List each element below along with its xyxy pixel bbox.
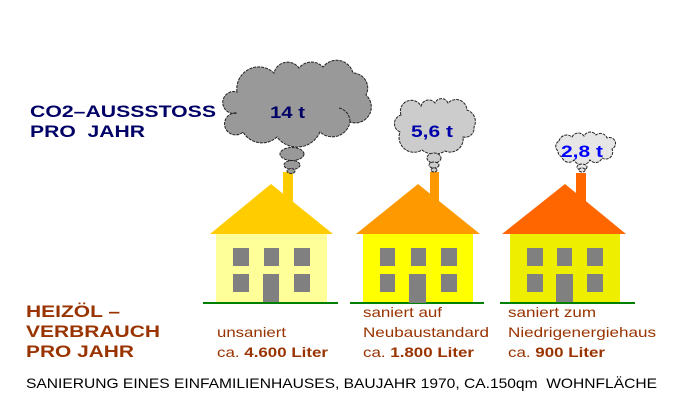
house 2: new-build standard [350, 172, 484, 304]
text: house 3 consumption: Niedrigenergiehaus [508, 324, 656, 340]
heading: heating oil consumption per year: VERBRAUCH [26, 322, 160, 341]
text: house 3 consumption [508, 304, 656, 360]
heading: CO2 output per year [30, 102, 216, 141]
text: house 2 consumption: saniert auf [363, 304, 442, 320]
text: house 1 consumption: ca. 4.600 Liter [217, 344, 329, 360]
cloud 3: 2,8 t [556, 132, 616, 172]
house 1: unrenovated [203, 172, 338, 304]
text: house 3 consumption: ca. 900 Liter [508, 344, 606, 360]
text: house 3 consumption: saniert zum [508, 304, 596, 320]
text: house 1 consumption [217, 324, 329, 360]
heading: heating oil consumption per year: HEIZÖL – [26, 302, 120, 321]
text: house 2 consumption: ca. 1.800 Liter [363, 344, 475, 360]
label: 5,6 t: 5,6 t [411, 122, 453, 141]
label: 14 t: 14 t [270, 103, 305, 122]
heading: CO2 output per year: PRO JAHR [30, 122, 145, 141]
footer caption: SANIERUNG EINES EINFAMILIENHAUSES, BAUJAHR 1970, CA.150qm WOHNFLÄCHE [26, 375, 657, 391]
heading: CO2 output per year: CO2–AUSSSTOSS [30, 102, 216, 121]
house 3: low-energy house [500, 173, 635, 304]
text: house 1 consumption: unsaniert [217, 324, 286, 340]
text: house 2 consumption [363, 304, 489, 360]
cloud 2: 5,6 t [394, 99, 475, 172]
heading: heating oil consumption per year [26, 302, 160, 361]
label: 2,8 t: 2,8 t [561, 142, 603, 161]
cloud 1: 14 t [223, 60, 371, 173]
text: house 2 consumption: Neubaustandard [363, 324, 489, 340]
heading: heating oil consumption per year: PRO JAHR [26, 342, 134, 361]
